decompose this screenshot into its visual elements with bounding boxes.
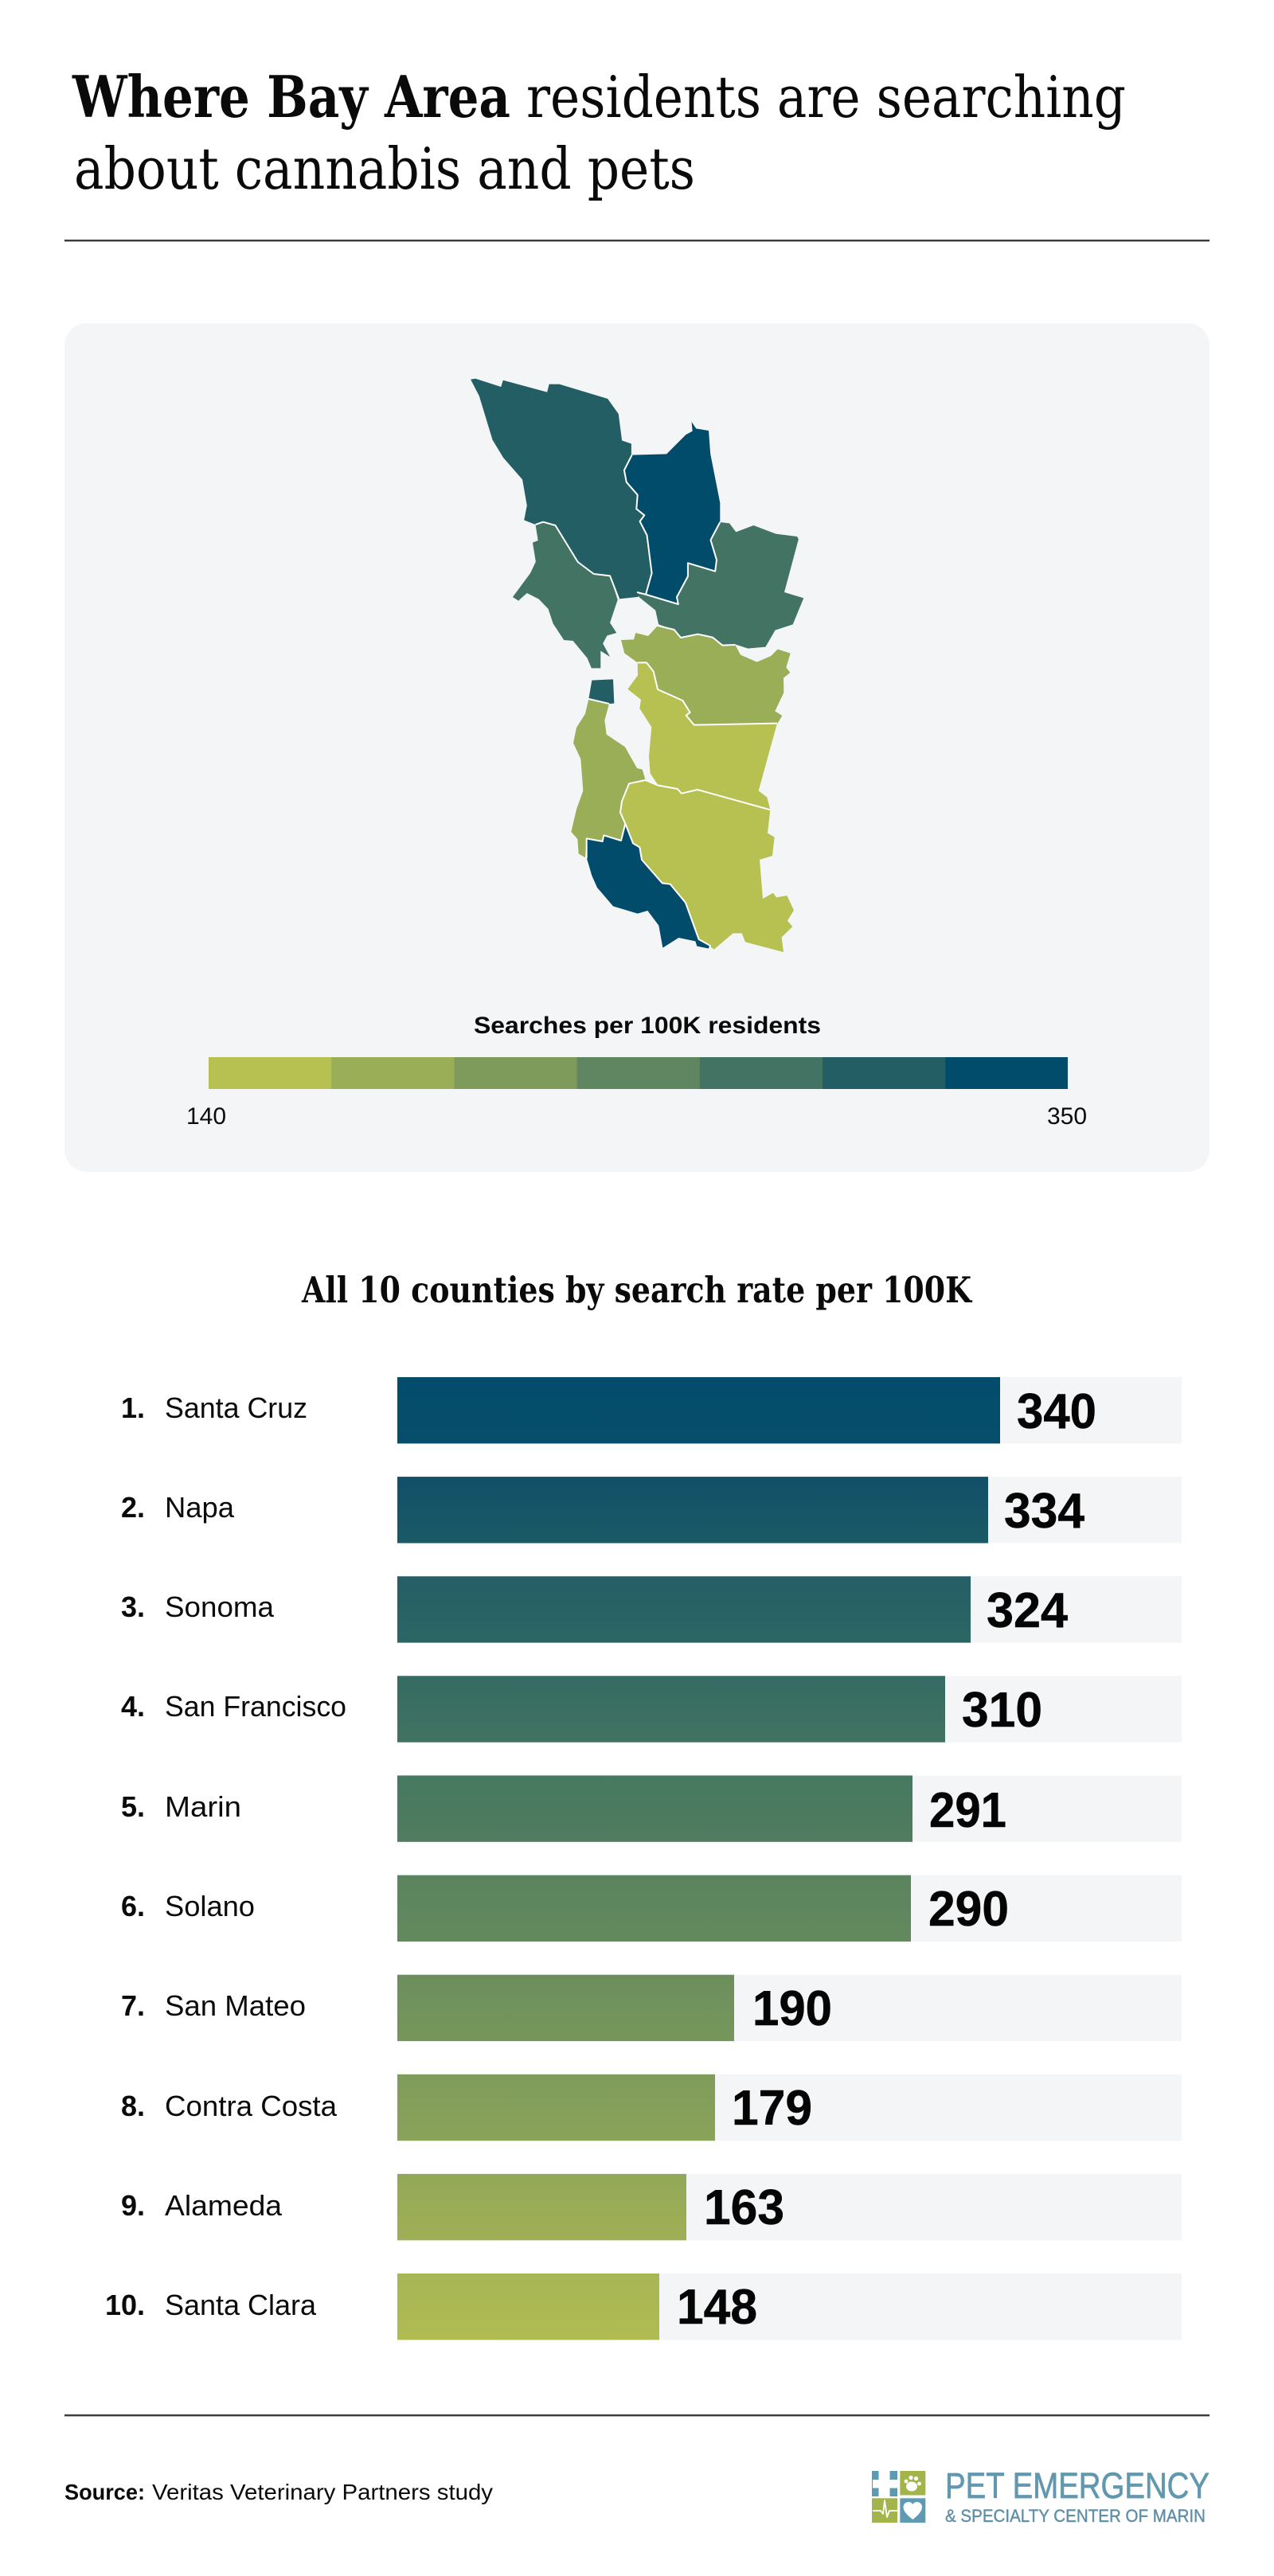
county: San Francisco — [588, 679, 614, 704]
title: residents are searching — [526, 64, 1126, 131]
row 9: Alameda: Alameda — [165, 2189, 283, 2222]
source note: Veritas Veterinary Partners study — [152, 2480, 493, 2504]
row 5: Marin: 291 — [929, 1783, 1006, 1838]
row 3: Sonoma: 324 — [987, 1583, 1069, 1638]
county: Santa Cruz — [587, 824, 710, 949]
row 2: Napa: Napa — [165, 1491, 235, 1524]
county: Marin — [513, 522, 618, 668]
map: Bay Area counties (lower) — [571, 626, 794, 952]
chart heading: All 10 counties by search rate per 100K — [301, 1269, 973, 1311]
row 3: Sonoma: Sonoma — [165, 1590, 275, 1623]
title: Where Bay Area — [72, 63, 510, 131]
row 4: San Francisco: 310 — [962, 1683, 1042, 1738]
map: Bay Area counties (upper) — [471, 379, 803, 668]
row 7: San Mateo: 190 — [752, 1981, 832, 2036]
county: Sonoma — [471, 379, 652, 599]
legend min label: 140 — [186, 1103, 226, 1130]
row 4: San Francisco: San Francisco — [165, 1690, 346, 1723]
row 7: San Mateo: 7. — [121, 1989, 145, 2022]
row 5: Marin: 5. — [121, 1790, 145, 1823]
icon: heart — [900, 2498, 925, 2523]
county: Santa Clara — [620, 780, 794, 952]
row 1: Santa Cruz: Santa Cruz — [165, 1391, 307, 1424]
county: Alameda — [627, 662, 777, 810]
logo tagline: & SPECIALTY CENTER OF MARIN — [945, 2506, 1206, 2526]
county: Contra Costa — [621, 626, 791, 725]
row 10: Santa Clara — [105, 2274, 1182, 2340]
row 5: Marin: Marin — [165, 1790, 241, 1823]
logo: Pet Emergency & Specialty Center of Marin — [872, 2465, 1210, 2526]
row 6: Solano: Solano — [165, 1890, 255, 1922]
row 8: Contra Costa: 8. — [121, 2090, 145, 2122]
row 9: Alameda: 163 — [704, 2180, 784, 2235]
row 2: Napa: 334 — [1004, 1484, 1084, 1539]
row 9: Alameda: 9. — [121, 2189, 145, 2222]
legend max label: 350 — [1047, 1103, 1087, 1130]
county: Napa — [624, 422, 720, 604]
title: about cannabis and pets — [74, 135, 695, 202]
row 4: San Francisco: 4. — [121, 1690, 145, 1723]
county: Solano — [639, 522, 803, 649]
row 10: Santa Clara: 10. — [105, 2289, 145, 2321]
row 5: Marin — [121, 1775, 1182, 1842]
row 2: Napa — [121, 1477, 1182, 1543]
row 6: Solano: 290 — [928, 1882, 1009, 1937]
row 9: Alameda — [121, 2174, 1182, 2240]
county borders (lower) — [587, 626, 777, 950]
row 4: San Francisco — [121, 1676, 1182, 1743]
logo wordmark: PET EMERGENCY — [945, 2465, 1210, 2506]
icon: medical cross — [872, 2471, 897, 2496]
row 6: Solano: 6. — [121, 1890, 145, 1922]
row 1: Santa Cruz: 1. — [121, 1391, 145, 1424]
icon: paw — [900, 2471, 925, 2495]
legend title: Searches per 100K residents — [474, 1013, 821, 1039]
row 2: Napa: 2. — [121, 1491, 145, 1524]
row 1: Santa Cruz — [121, 1377, 1182, 1443]
row 1: Santa Cruz: 340 — [1017, 1384, 1096, 1439]
source note: Source: — [64, 2480, 145, 2504]
row 3: Sonoma: 3. — [121, 1590, 145, 1623]
row 6: Solano — [121, 1875, 1182, 1942]
bar chart — [105, 1377, 1182, 2340]
county borders (upper) — [535, 455, 720, 604]
legend colour scale — [209, 1057, 1068, 1089]
row 10: Santa Clara: 148 — [677, 2280, 757, 2335]
row 8: Contra Costa — [121, 2074, 1182, 2141]
row 10: Santa Clara: Santa Clara — [165, 2289, 317, 2321]
row 8: Contra Costa: 179 — [732, 2081, 812, 2136]
icon: heartbeat — [872, 2498, 897, 2523]
row 3: Sonoma — [121, 1576, 1182, 1643]
title — [72, 63, 1126, 202]
row 7: San Mateo — [121, 1975, 1182, 2041]
county: San Mateo — [571, 699, 646, 857]
row 7: San Mateo: San Mateo — [165, 1989, 306, 2022]
panel: map — [64, 323, 1210, 1172]
row 8: Contra Costa: Contra Costa — [165, 2090, 338, 2122]
